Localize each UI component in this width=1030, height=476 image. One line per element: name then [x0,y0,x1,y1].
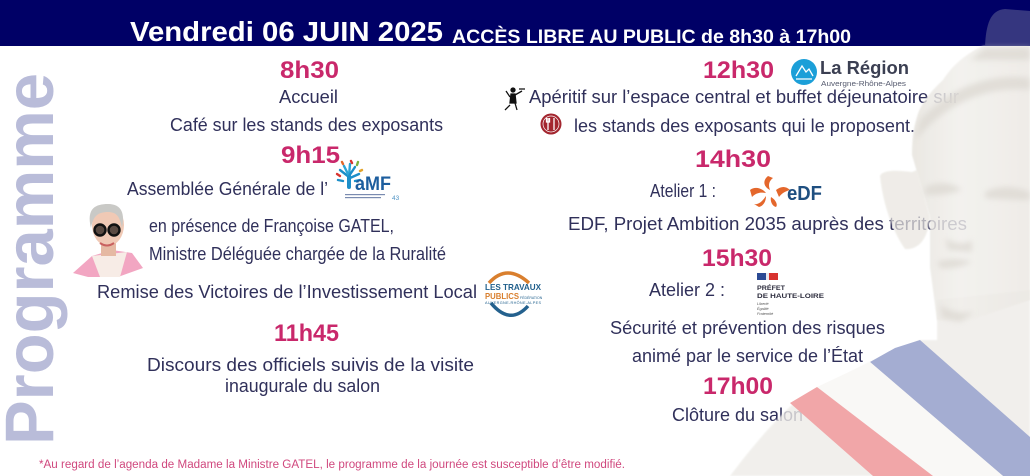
logo: Les Travaux Publics [485,273,543,315]
sash: blue stripe [870,340,1030,476]
photo: Françoise Gatel [73,204,143,277]
assembly line: Assemblée Générale de l’ [127,179,328,199]
15h30 time: 15h30 [702,245,772,272]
11h45 description: Discours des officiels suivis de la visite [147,355,474,375]
logo: Préfet de Haute-Loire: PRÉFET [757,283,785,292]
logo: Préfet de Haute-Loire: Liberté [757,302,769,306]
workshop 2 label: Atelier 2 : [649,280,725,300]
minister text: en présence de Françoise GATEL, [149,216,394,236]
icon: restaurant [540,114,562,134]
logo: AMF: aMF [355,174,391,195]
8h30 description [170,87,443,135]
minister text: Ministre Déléguée chargée de la Ruralité [149,244,446,264]
logo: Préfet de Haute-Loire: Égalité [757,306,769,311]
17h00 time: 17h00 [703,373,773,400]
logo: La Région: Auvergne-Rhône-Alpes [821,79,906,88]
logo: EDF [750,176,822,207]
closing text: Clôture du salon [672,405,803,425]
11h45 description: inaugurale du salon [225,376,380,396]
icon: waiter [505,88,525,110]
logo: La Région: La Région [820,58,909,78]
12h30 time: 12h30 [703,57,774,84]
workshop 2 description [610,318,885,366]
lunch text: Apéritif sur l’espace central et buffet déjeunatoire sur [529,87,959,107]
left column: morning programme [73,57,543,396]
logo: AMF [337,161,400,202]
head [912,46,1030,322]
logo: Préfet de Haute-Loire: DE HAUTE-LOIRE [757,293,825,300]
logo: Les Travaux Publics: AUVERGNE-RHÔNE-ALPES [485,300,541,305]
logo: Préfet de Haute-Loire: Fraternité [757,312,773,316]
logo: Préfet de Haute-Loire [757,273,825,316]
8h30 description: Café sur les stands des exposants [170,115,443,135]
9h15 time: 9h15 [281,142,340,169]
workshop 1 label: Atelier 1 : [650,181,716,201]
logo: AMF: 43 [392,195,400,202]
logo: Les Travaux Publics: LES TRAVAUX [485,282,541,292]
header band [0,0,1030,48]
sash: red stripe [790,387,933,476]
workshop 2 description: animé par le service de l’État [632,346,863,366]
logo: La Région [791,58,909,88]
sash: white stripe [817,362,1003,476]
14h30 time: 14h30 [695,146,771,173]
facial shading [915,48,1030,322]
11h45 time: 11h45 [274,320,339,347]
minister text [149,216,446,264]
lunch text: les stands des exposants qui le proposent. [574,116,915,136]
cap top in navy band [985,9,1030,46]
statue: Marianne bust [730,9,1030,476]
8h30 time: 8h30 [280,57,339,84]
awards line: Remise des Victoires de l’Investissement Local [97,282,477,302]
8h30 description: Accueil [279,87,338,107]
logo: EDF: eDF [787,183,822,205]
subtitle: public access: ACCÈS LIBRE AU PUBLIC de 8h30 à 17h00 [452,26,851,48]
ear flap of cap [880,170,930,249]
right column: afternoon programme [505,57,967,425]
shoulders and neck [730,290,1030,476]
lunch text [529,87,959,136]
workshop 2 description: Sécurité et prévention des risques [610,318,885,338]
logo: Les Travaux Publics: PUBLICS [485,291,519,301]
title: date: Vendredi 06 JUIN 2025 [130,16,443,47]
logo: Les Travaux Publics: FÉDÉRATION [520,295,543,300]
workshop 1 description: EDF, Projet Ambition 2035 auprès des territoires [568,214,967,234]
footnote: *Au regard de l’agenda de Madame la Ministre GATEL, le programme de la journée est susceptible d’être modifié. [39,459,625,471]
11h45 description [147,355,474,396]
